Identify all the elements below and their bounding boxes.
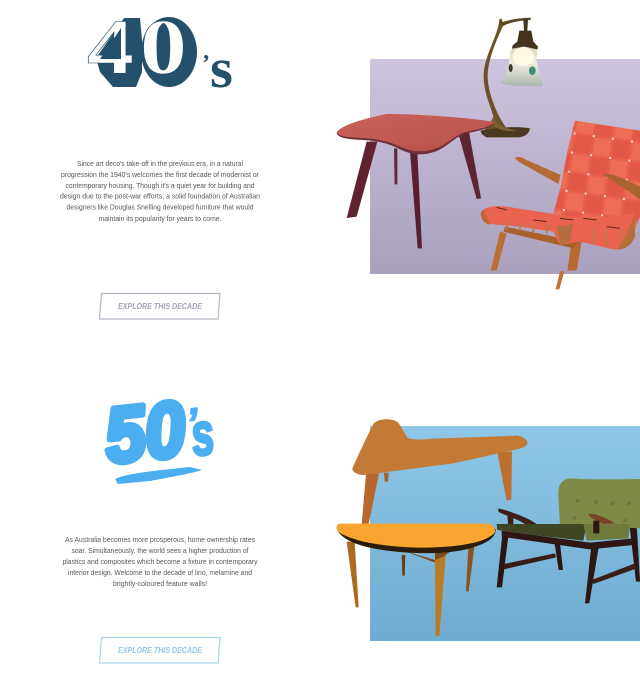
heading: 50's: 50 bbox=[101, 385, 189, 480]
illustration: 1950s furniture bbox=[337, 419, 640, 636]
text block: 1950s description: soar. Simultaneously, the world sees a higher production of bbox=[72, 546, 249, 555]
text block: 1940s description: designers like Douglas Snelling developed furniture that would bbox=[66, 202, 254, 212]
button: explore 1940s: EXPLORE THIS DECADE bbox=[118, 302, 202, 311]
half-round table bbox=[337, 524, 496, 636]
heading: 40's: 4 bbox=[87, 3, 134, 90]
text block: 1940s description: Since art deco's take-off in the previous era, in a natural bbox=[77, 159, 243, 168]
button: explore 1950s: EXPLORE THIS DECADE bbox=[118, 646, 202, 655]
text block: 1950s description: plastics and composites which become a fixture in contemporary bbox=[62, 557, 258, 566]
heading: 40's bbox=[87, 3, 233, 100]
text block: 1950s description: brightly-coloured feature walls! bbox=[113, 579, 207, 588]
text block: 1940s description: maintain its popularity for years to come. bbox=[98, 214, 222, 223]
heading: 50's: s bbox=[187, 400, 218, 469]
lamp bbox=[481, 18, 543, 137]
chair bbox=[481, 121, 640, 289]
heading: 40's: s bbox=[210, 38, 233, 100]
text block: 1950s description: interior design. Welcome to the decade of lino, melamine and bbox=[68, 568, 252, 577]
text block: 1940s description: contemporary housing. Though it's a quiet year for building and bbox=[66, 181, 254, 190]
green chair bbox=[497, 478, 640, 603]
text block: 1940s description: design due to the post-war efforts, a solid foundation of Australian bbox=[60, 192, 260, 200]
text block: 1950s description: As Australia becomes more prosperous, home ownership rates bbox=[65, 535, 255, 544]
button: explore 1940s bbox=[100, 294, 220, 319]
text block: 1950s description bbox=[62, 535, 258, 588]
panel: 1950s background bbox=[370, 426, 640, 641]
boomerang table bbox=[352, 419, 527, 524]
panel: 1940s background bbox=[370, 59, 640, 274]
heading: 40's: 0 bbox=[140, 3, 187, 90]
button: explore 1950s bbox=[100, 638, 220, 663]
heading: 50's: ’ bbox=[184, 399, 202, 447]
text block: 1940s description bbox=[60, 159, 260, 223]
text block: 1940s description: progression the 1940's welcomes the first decade of modernist or bbox=[61, 170, 259, 179]
illustration: 1940s furniture bbox=[337, 18, 640, 289]
heading: 40's: ’ bbox=[202, 51, 210, 77]
table bbox=[337, 114, 495, 248]
underline swoosh bbox=[115, 467, 202, 484]
